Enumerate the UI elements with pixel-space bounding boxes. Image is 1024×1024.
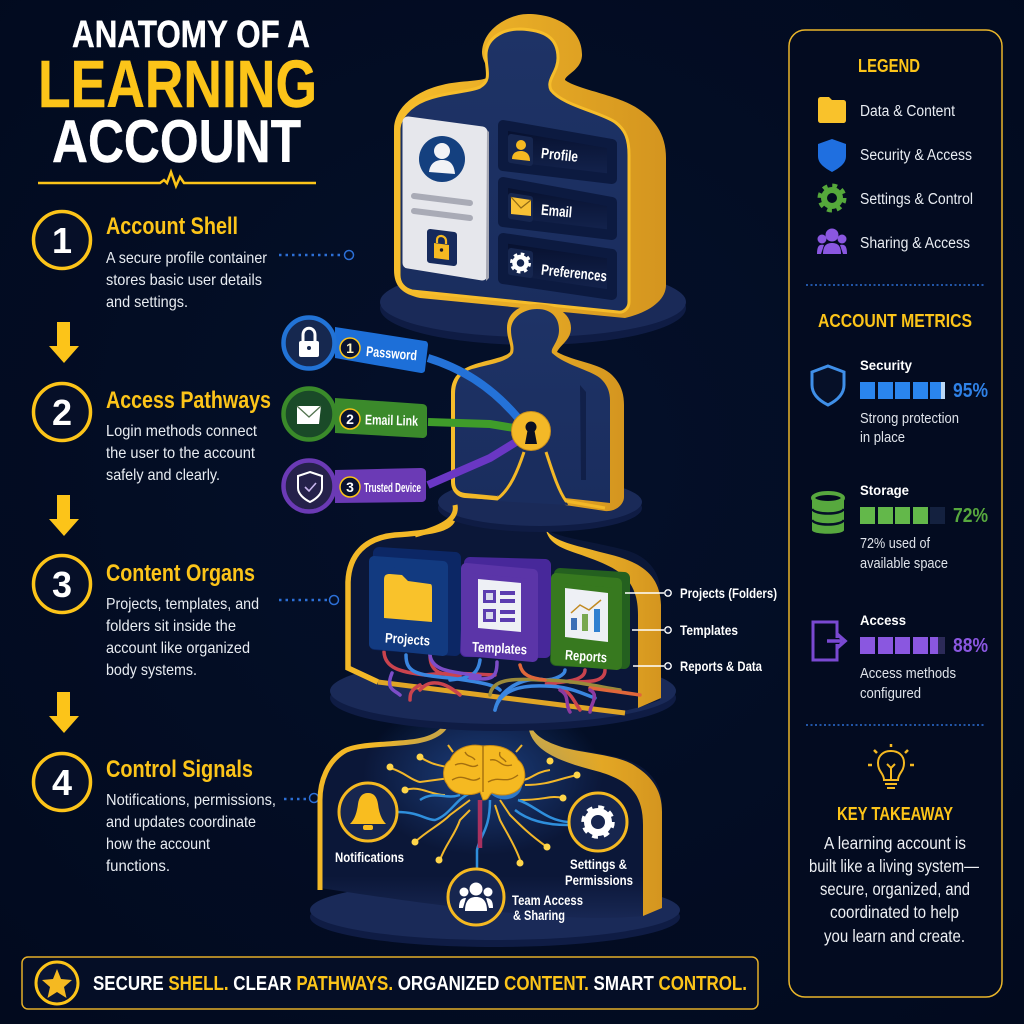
platform xyxy=(330,658,676,731)
card: templates xyxy=(466,563,545,657)
tube: email link xyxy=(428,422,514,428)
step 2: access pathways: 2 xyxy=(52,392,72,433)
icon: notifications bell xyxy=(339,783,397,841)
icon: keyhole xyxy=(512,412,550,450)
label: team access and sharing xyxy=(512,892,583,923)
arrow: step 1 to 2 xyxy=(49,322,79,363)
layer 2: access pathways body xyxy=(284,304,642,535)
icon: template sheet xyxy=(478,579,521,632)
callout: templates xyxy=(632,622,738,638)
metric: access: 88% xyxy=(953,635,988,657)
label: settings and permissions: Permissions xyxy=(565,872,633,888)
platform xyxy=(438,478,642,532)
callout: reports and data xyxy=(633,658,762,674)
label: notifications: Notifications xyxy=(335,849,404,865)
card: reports: Reports xyxy=(565,647,608,665)
layer 4: control signals body xyxy=(310,695,680,947)
glow xyxy=(363,695,603,855)
step 1: account shell: stores basic user details xyxy=(106,272,262,289)
step 4: control signals xyxy=(34,754,276,875)
pill: trusted device: 3 xyxy=(346,479,354,495)
icon: avatar xyxy=(419,136,465,182)
connector: step 3 xyxy=(279,596,338,604)
step 2: access pathways xyxy=(34,384,271,484)
neck of layer 3 connection xyxy=(415,505,455,535)
torso rim xyxy=(451,304,624,511)
legend: security and access xyxy=(818,139,972,172)
right panel xyxy=(789,30,1002,997)
icon: star badge xyxy=(36,962,78,1004)
legend: settings and control xyxy=(820,186,973,210)
shelf: email xyxy=(503,182,612,235)
callout: templates: Templates xyxy=(680,622,738,638)
step 3: content organs xyxy=(34,556,259,679)
pill: password xyxy=(284,318,428,373)
shelf: preferences: Preferences xyxy=(540,262,608,285)
shelf: profile xyxy=(503,125,612,179)
torso front xyxy=(455,309,610,503)
legend: sharing and access xyxy=(817,228,970,254)
title: ANATOMY OF A xyxy=(72,14,310,56)
card: projects xyxy=(374,553,455,651)
metric: access: Access methods xyxy=(860,665,956,682)
shell front face xyxy=(399,29,629,312)
title: ACCOUNT xyxy=(52,108,301,175)
step 3: content organs: folders sit inside the xyxy=(106,618,236,635)
step 2: access pathways: Access Pathways xyxy=(106,387,271,414)
step 1: account shell: 1 xyxy=(52,220,72,261)
step 2: access pathways: safely and clearly. xyxy=(106,467,220,484)
shell extrusion xyxy=(394,14,666,318)
step 1: account shell: A secure profile container xyxy=(106,250,268,267)
legend: sharing and access: Sharing & Access xyxy=(860,235,970,252)
pill: email link xyxy=(284,388,427,440)
pill: password: 1 xyxy=(346,340,354,356)
neural network xyxy=(390,745,578,868)
metric: security: Strong protection xyxy=(860,410,959,427)
step 3: content organs: 3 xyxy=(52,564,72,605)
takeaway text: secure, organized, and xyxy=(820,879,970,899)
metric: storage: 72% xyxy=(953,505,988,527)
torso between legs xyxy=(495,448,568,505)
icon: light bulb xyxy=(868,744,914,788)
pill: email link: 2 xyxy=(346,411,354,427)
shelf: email: Email xyxy=(540,202,573,221)
legend: security and access: Security & Access xyxy=(860,147,972,164)
connector: step 1 xyxy=(279,250,354,260)
step 3: content organs: account like organized xyxy=(106,640,250,657)
shelf: profile: Profile xyxy=(540,145,579,166)
metric: access: configured xyxy=(860,685,921,702)
shell xyxy=(320,710,662,918)
card: projects: Projects xyxy=(385,629,431,649)
card: templates: Templates xyxy=(472,639,528,657)
pill: trusted device: Trusted Device xyxy=(364,480,421,495)
platform xyxy=(310,880,680,947)
shelf: preferences xyxy=(503,238,612,295)
step 4: control signals: functions. xyxy=(106,858,170,875)
label: settings and permissions: Settings & xyxy=(570,856,627,872)
metric: access: Access xyxy=(860,612,906,628)
metric: access xyxy=(813,612,988,702)
takeaway text: coordinated to help xyxy=(830,902,959,922)
step 4: control signals: and updates coordinate xyxy=(106,814,256,831)
slogan: SECURE SHELL. CLEAR PATHWAYS. ORGANIZED CONTENT. SMART CONTROL. xyxy=(93,973,747,995)
leg lines xyxy=(465,452,605,508)
takeaway text: you learn and create. xyxy=(824,926,965,946)
takeaway text xyxy=(809,833,979,946)
metric: security: 95% xyxy=(953,380,988,402)
layer 1: account shell body xyxy=(380,14,686,345)
tube: trusted device xyxy=(428,442,516,485)
legend: data and content: Data & Content xyxy=(860,103,956,120)
takeaway heading: KEY TAKEAWAY xyxy=(837,804,953,824)
legend: data and content xyxy=(818,97,956,123)
pipes xyxy=(384,652,640,712)
arrow: step 2 to 3 xyxy=(49,495,79,536)
step 1: account shell: Account Shell xyxy=(106,213,238,240)
profile card xyxy=(408,122,489,281)
step 4: control signals: Control Signals xyxy=(106,756,253,783)
metric: security: in place xyxy=(860,429,905,446)
pill: email link: Email Link xyxy=(365,411,418,429)
placeholder lines xyxy=(414,196,470,218)
takeaway text: A learning account is xyxy=(824,833,966,853)
metrics heading: ACCOUNT METRICS xyxy=(818,311,972,331)
metric: security: Security xyxy=(860,357,912,373)
tube: password xyxy=(428,358,518,418)
label: team access and sharing: Team Access xyxy=(512,892,583,908)
icon: team xyxy=(448,869,504,925)
callout: projects (folders) xyxy=(625,585,777,601)
callout: projects (folders): Projects (Folders) xyxy=(680,585,777,601)
icon: lock tile xyxy=(430,232,454,263)
pill: trusted device xyxy=(284,460,426,512)
bottom banner xyxy=(22,957,758,1009)
metric: storage: 72% used of xyxy=(860,535,931,552)
step 4: control signals: Notifications, permissions, xyxy=(106,792,276,809)
label: settings and permissions xyxy=(565,856,633,888)
step 4: control signals: how the account xyxy=(106,836,210,853)
step 1: account shell xyxy=(34,212,268,311)
connector: step 4 xyxy=(284,794,318,802)
icon: settings gear xyxy=(569,793,627,851)
metric: security xyxy=(812,357,988,446)
step 2: access pathways: the user to the account xyxy=(106,445,256,462)
icon: brain xyxy=(444,745,525,800)
callout: reports and data: Reports & Data xyxy=(680,658,762,674)
takeaway text: built like a living system— xyxy=(809,856,979,876)
step 2: access pathways: Login methods connect xyxy=(106,423,257,440)
icon: chart sheet xyxy=(565,588,608,642)
arrow: step 3 to 4 xyxy=(49,692,79,733)
title xyxy=(38,14,317,186)
platform xyxy=(380,267,686,345)
pill: password: Password xyxy=(365,343,418,363)
legend: settings and control: Settings & Control xyxy=(860,191,973,208)
step 4: control signals: 4 xyxy=(52,762,72,803)
metric: storage xyxy=(812,482,988,572)
step 1: account shell: and settings. xyxy=(106,294,188,311)
shell rim xyxy=(348,518,453,682)
signal nodes xyxy=(386,754,580,866)
label: team access and sharing: & Sharing xyxy=(513,907,565,923)
step 3: content organs: Content Organs xyxy=(106,560,255,587)
metric: storage: available space xyxy=(860,555,948,572)
title: LEARNING xyxy=(38,47,317,122)
legend heading: LEGEND xyxy=(858,56,920,76)
layer 3: content organs body xyxy=(330,515,777,731)
card: reports xyxy=(556,574,624,665)
shell interior xyxy=(349,515,660,712)
step 3: content organs: Projects, templates, and xyxy=(106,596,259,613)
metric: storage: Storage xyxy=(860,482,909,498)
step 3: content organs: body systems. xyxy=(106,662,197,679)
icon: folder xyxy=(384,574,432,622)
